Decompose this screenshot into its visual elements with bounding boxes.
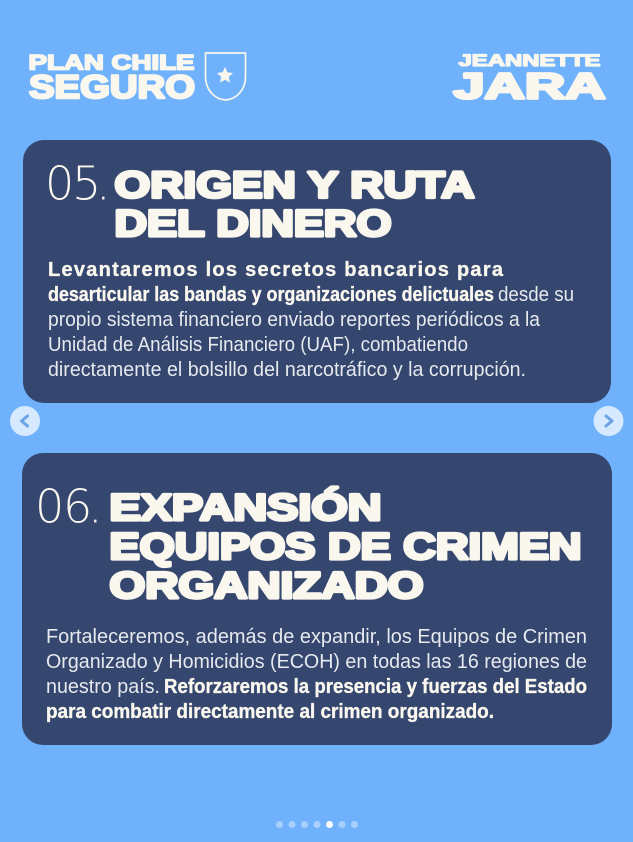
heading: origen y ruta del dinero: ORIGEN Y RUTA bbox=[114, 164, 474, 206]
logo text: SEGURO bbox=[29, 69, 195, 105]
body text: Levantaremos los secretos bancarios para bbox=[48, 259, 504, 281]
logo text: PLAN CHILE bbox=[28, 50, 194, 74]
body text: Organizado y Homicidios (ECOH) en todas las 16 regiones de bbox=[46, 651, 587, 673]
number 05: 05. bbox=[45, 156, 111, 210]
body text: Reforzaremos la presencia y fuerzas del Estado bbox=[164, 676, 587, 698]
heading: expansion equipos de crimen organizado: EXPANSIÓN bbox=[110, 486, 382, 528]
body text: Fortaleceremos, además de expandir, los Equipos de Crimen bbox=[46, 626, 587, 648]
body text: para combatir directamente al crimen organizado. bbox=[46, 701, 494, 723]
heading: expansion equipos de crimen organizado: ORGANIZADO bbox=[110, 565, 424, 606]
heading: expansion equipos de crimen organizado bbox=[110, 486, 582, 606]
panel: 05 origen y ruta del dinero bbox=[23, 140, 611, 403]
heading: expansion equipos de crimen organizado: EQUIPOS DE CRIMEN bbox=[110, 526, 582, 567]
body text: nuestro país. bbox=[46, 676, 160, 698]
logo: Jeannette Jara bbox=[454, 52, 606, 106]
heading: origen y ruta del dinero: DEL DINERO bbox=[114, 203, 392, 244]
logo: Jeannette Jara: JARA bbox=[454, 66, 606, 106]
heading: origen y ruta del dinero bbox=[114, 164, 474, 244]
panel: 06 expansion equipos de crimen organizado bbox=[22, 453, 612, 745]
body text: directamente el bolsillo del narcotráfico y la corrupción. bbox=[48, 359, 526, 381]
body text: propio sistema financiero enviado reportes periódicos a la bbox=[48, 309, 541, 331]
number 06: 06. bbox=[35, 480, 103, 534]
logo: Jeannette Jara: JEANNETTE bbox=[458, 52, 600, 70]
logo: Plan Chile Seguro bbox=[28, 50, 246, 105]
pagination dots bbox=[276, 821, 358, 828]
arrow: previous bbox=[10, 406, 40, 436]
arrow: next bbox=[594, 406, 624, 436]
body text: desarticular las bandas y organizaciones delictuales bbox=[48, 284, 494, 306]
body text: desde su bbox=[498, 284, 574, 306]
body text bbox=[48, 259, 574, 381]
logo text bbox=[28, 50, 195, 105]
icon: shield with star bbox=[206, 53, 246, 100]
body text bbox=[46, 626, 587, 723]
body text: Unidad de Análisis Financiero (UAF), combatiendo bbox=[48, 334, 468, 356]
